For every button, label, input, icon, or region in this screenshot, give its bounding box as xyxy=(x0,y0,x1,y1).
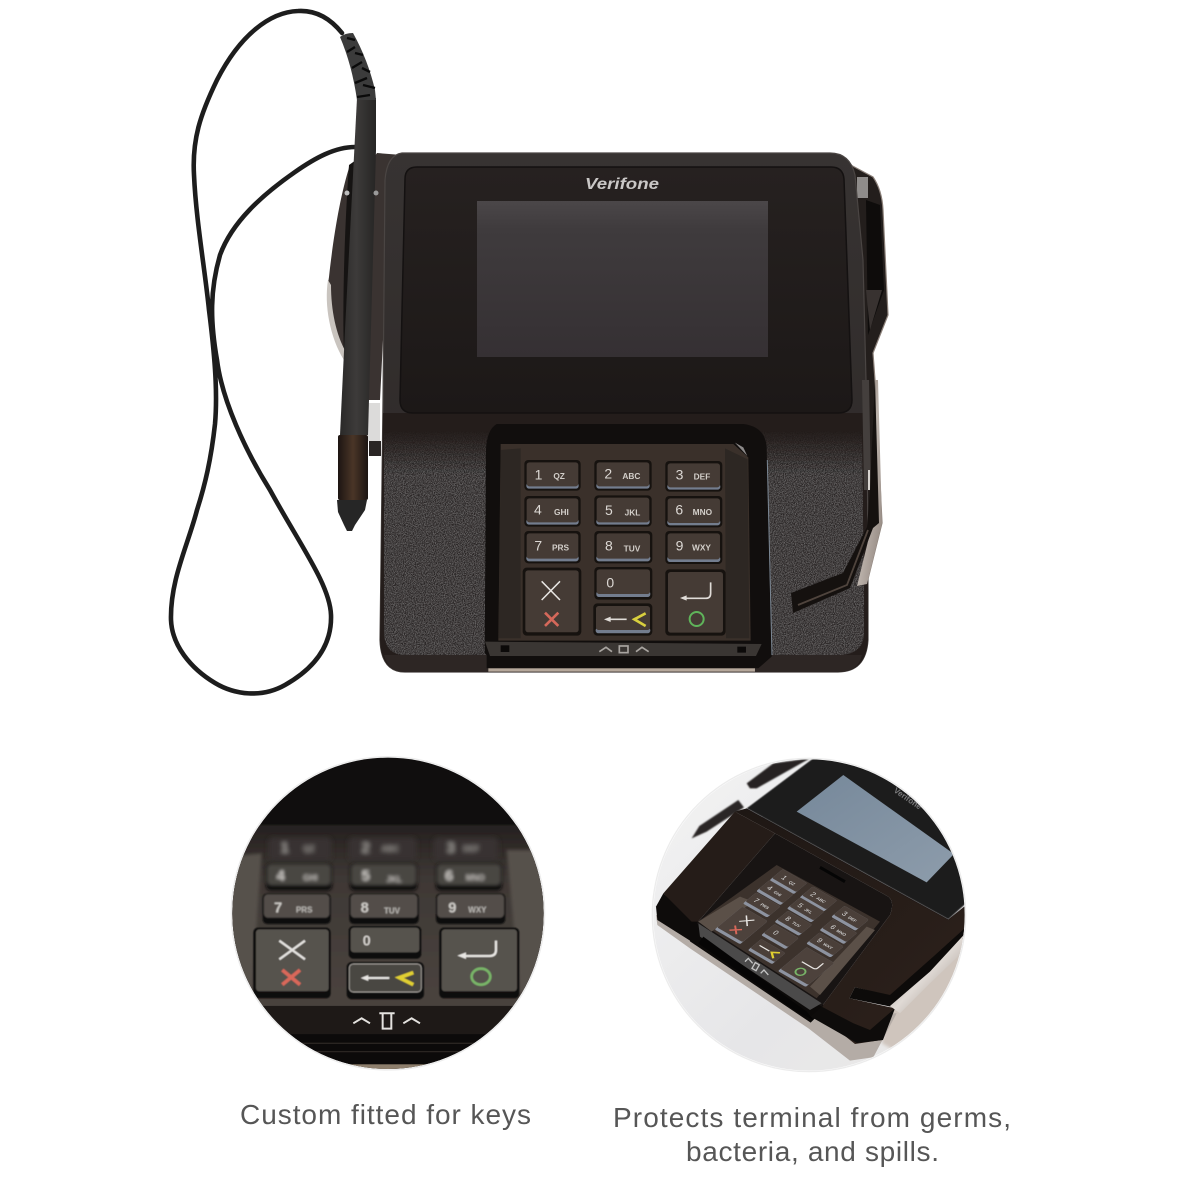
key 3: 3 xyxy=(676,466,684,482)
screen xyxy=(797,775,954,882)
blurred row 3 keys: PRS xyxy=(296,906,313,915)
key 7: 7 xyxy=(534,537,542,553)
lower smooth housing xyxy=(380,413,868,672)
blurred row 1 keys: 1 xyxy=(281,841,289,857)
right rough edge xyxy=(810,927,875,995)
zero key: 0 xyxy=(363,934,371,950)
left textured strip xyxy=(499,448,521,638)
keypad recess xyxy=(485,424,772,668)
key 0: 0 xyxy=(771,929,781,937)
blurred row 3 keys xyxy=(263,893,505,924)
bracket bolt xyxy=(369,441,381,456)
key 1: QZ xyxy=(553,471,565,481)
pen clip hole left xyxy=(344,190,350,196)
blurred row 2 keys: JKL xyxy=(387,875,402,884)
key 4: 4 xyxy=(534,502,542,518)
stylus tip xyxy=(692,800,744,838)
fin accent xyxy=(791,380,879,613)
blurred row 2 keys: GHI xyxy=(303,874,318,883)
tan side shadow xyxy=(881,942,962,1048)
key 2: ABC xyxy=(622,471,640,481)
holder silver edge xyxy=(327,280,346,360)
tabletop xyxy=(654,760,964,1070)
blurred row 3 keys: 9 xyxy=(448,901,456,917)
key 4 xyxy=(756,880,794,905)
silver strip xyxy=(857,380,882,586)
key 6: 6 xyxy=(675,502,683,518)
circle outline xyxy=(231,757,545,1070)
key 9: WXY xyxy=(822,942,834,950)
key 2: 2 xyxy=(604,466,612,482)
display bezel xyxy=(400,167,852,413)
left rough edge xyxy=(230,853,262,993)
key backspace xyxy=(748,939,785,964)
card slot xyxy=(702,936,743,966)
key 8 xyxy=(594,531,652,563)
key 6 xyxy=(820,919,857,944)
card-guide strip xyxy=(485,642,762,656)
rim highlight xyxy=(384,655,862,672)
silver bottom edge xyxy=(656,915,897,1061)
key 7: PRS xyxy=(759,902,771,910)
fin accent xyxy=(849,925,968,1007)
key 5: 5 xyxy=(605,502,613,518)
recess right wall line xyxy=(767,460,772,655)
reader connector xyxy=(857,177,868,198)
caption: protects terminal: Protects terminal from germs, xyxy=(613,1102,1011,1133)
key 6 xyxy=(665,496,722,527)
terminal xyxy=(327,33,888,672)
front black base xyxy=(690,922,823,1023)
card guide strip xyxy=(698,923,822,1010)
key 9: WXY xyxy=(692,543,711,553)
stylus holder xyxy=(328,153,402,400)
enter key xyxy=(439,928,519,998)
blurred row 2 keys: MNO xyxy=(466,874,485,883)
blurred row 1 keys: 3 xyxy=(447,841,455,857)
zero key xyxy=(349,926,421,959)
key 2 xyxy=(594,460,652,491)
reader black slots xyxy=(866,200,884,335)
key 9: 9 xyxy=(815,936,825,944)
pen clip hole right xyxy=(374,190,378,196)
large and lower keys xyxy=(253,926,519,999)
blurred row 1 keys xyxy=(270,838,497,858)
fin glossy line xyxy=(798,530,868,605)
card reader side xyxy=(840,163,888,585)
caption: protects terminal: bacteria, and spills. xyxy=(686,1136,939,1167)
blurred stylus xyxy=(692,758,810,838)
blurred row 1 keys: QZ xyxy=(303,844,315,853)
key 7 xyxy=(524,531,581,563)
key 5: JKL xyxy=(625,508,640,518)
key 0: 0 xyxy=(606,575,614,591)
cancel key xyxy=(253,928,331,998)
right rough edge xyxy=(507,850,547,993)
key 1: 1 xyxy=(535,466,543,482)
keypad plate xyxy=(698,865,880,998)
right edge highlight xyxy=(868,470,870,490)
keys xyxy=(715,869,869,987)
background surface xyxy=(232,758,544,1069)
blurred row 3 keys: 7 xyxy=(274,901,282,917)
key 3: DEF xyxy=(694,472,710,482)
front lip xyxy=(488,668,755,672)
key 2 xyxy=(800,886,837,912)
key 5 xyxy=(594,495,652,527)
key 8: TUV xyxy=(624,543,641,553)
blurred row 1 keys: DEF xyxy=(463,844,479,853)
keypad assembly xyxy=(485,424,772,672)
blurred row 2 keys: 5 xyxy=(362,869,370,885)
strain relief xyxy=(340,33,376,100)
stylus top xyxy=(747,758,810,788)
key 5 xyxy=(787,897,824,923)
key 8: 8 xyxy=(783,915,793,923)
keypad surface xyxy=(230,825,547,1007)
key 0 xyxy=(594,567,652,600)
stylus cable xyxy=(171,11,355,693)
key 5: JKL xyxy=(803,907,814,915)
strip right hole xyxy=(737,647,746,653)
blurred row 2 keys: 6 xyxy=(445,869,453,885)
terminal body xyxy=(380,153,868,672)
photo: close-up of keys xyxy=(230,756,546,1070)
lit corner xyxy=(735,443,747,456)
key 8: TUV xyxy=(791,921,802,928)
key 8: 8 xyxy=(605,538,613,554)
right textured strip xyxy=(725,448,749,638)
strip left hole xyxy=(501,645,509,652)
backspace key xyxy=(347,962,424,999)
right bumper xyxy=(811,1007,895,1043)
key 9: 9 xyxy=(676,537,684,553)
left bumper xyxy=(656,893,693,941)
key 3 xyxy=(831,906,869,931)
right edge band xyxy=(862,380,871,490)
stylus xyxy=(337,33,378,531)
card-guide icon xyxy=(599,646,649,653)
key 7: PRS xyxy=(552,543,570,553)
key 6: 6 xyxy=(828,923,838,931)
key 5: 5 xyxy=(795,901,806,909)
tan edge xyxy=(350,1064,426,1069)
blurred row 2 keys: 4 xyxy=(277,869,286,885)
strain relief slits xyxy=(347,38,375,97)
caption: protects terminal xyxy=(613,1102,1011,1167)
brand blur: Verifone xyxy=(892,786,924,812)
blurred row 3 keys: 8 xyxy=(361,901,369,917)
card icon xyxy=(745,958,768,975)
key 9 xyxy=(665,531,722,564)
slot lines xyxy=(300,1043,480,1052)
reader rib xyxy=(866,290,882,330)
right housing xyxy=(735,808,968,1044)
display panel xyxy=(747,758,973,919)
caption: custom fitted: Custom fitted for keys xyxy=(240,1099,531,1130)
card icon xyxy=(353,1013,420,1029)
wood grip xyxy=(338,435,368,500)
key 0 xyxy=(761,924,799,949)
left housing xyxy=(663,812,775,923)
blurred row 3 keys: TUV xyxy=(384,906,401,915)
key 6: MNO xyxy=(693,507,713,517)
key 4: 4 xyxy=(765,884,775,892)
brand logo: Verifone xyxy=(585,176,659,193)
blurred row 3 keys: WXY xyxy=(468,906,487,915)
key cancel xyxy=(715,907,768,944)
key 2: ABC xyxy=(815,896,827,904)
holder lower bracket xyxy=(368,403,380,441)
key 6: MNO xyxy=(835,929,848,937)
key 8 xyxy=(775,911,812,936)
key 4 xyxy=(524,496,581,527)
dark lower slots xyxy=(290,1034,486,1064)
key 4: GHI xyxy=(772,890,783,897)
pen barrel xyxy=(340,98,376,435)
left rough edge xyxy=(698,896,748,932)
blurred row 1 keys: ABC xyxy=(382,844,399,853)
keypad recess xyxy=(697,833,892,1007)
card guide strip xyxy=(260,1006,517,1034)
pen tip xyxy=(337,500,367,531)
key enter xyxy=(778,947,834,987)
circle outline xyxy=(652,758,966,1072)
silver fin edge xyxy=(890,930,968,1013)
key 1 xyxy=(524,460,581,491)
blurred row 2 keys xyxy=(266,863,502,891)
key cancel xyxy=(523,568,581,636)
slot recess mark xyxy=(820,867,845,882)
key 4: GHI xyxy=(554,507,569,517)
key 7 xyxy=(743,892,780,918)
blurred row 1 keys: 2 xyxy=(362,841,370,857)
screen xyxy=(477,201,768,357)
textured housing xyxy=(384,430,864,655)
photo: angled view of terminal xyxy=(652,758,966,1072)
key 1 xyxy=(770,869,807,894)
key 3 xyxy=(665,461,722,492)
key enter xyxy=(665,569,726,636)
key 1: QZ xyxy=(787,880,797,886)
keypad cover plate xyxy=(498,444,751,641)
holder black band xyxy=(343,160,356,358)
key 2: 2 xyxy=(808,890,818,898)
key 3: DEF xyxy=(847,915,858,923)
key 7: 7 xyxy=(751,896,762,904)
key 1: 1 xyxy=(779,874,790,882)
key 3: 3 xyxy=(840,910,850,918)
key backspace xyxy=(593,603,652,636)
key 9 xyxy=(806,932,844,958)
